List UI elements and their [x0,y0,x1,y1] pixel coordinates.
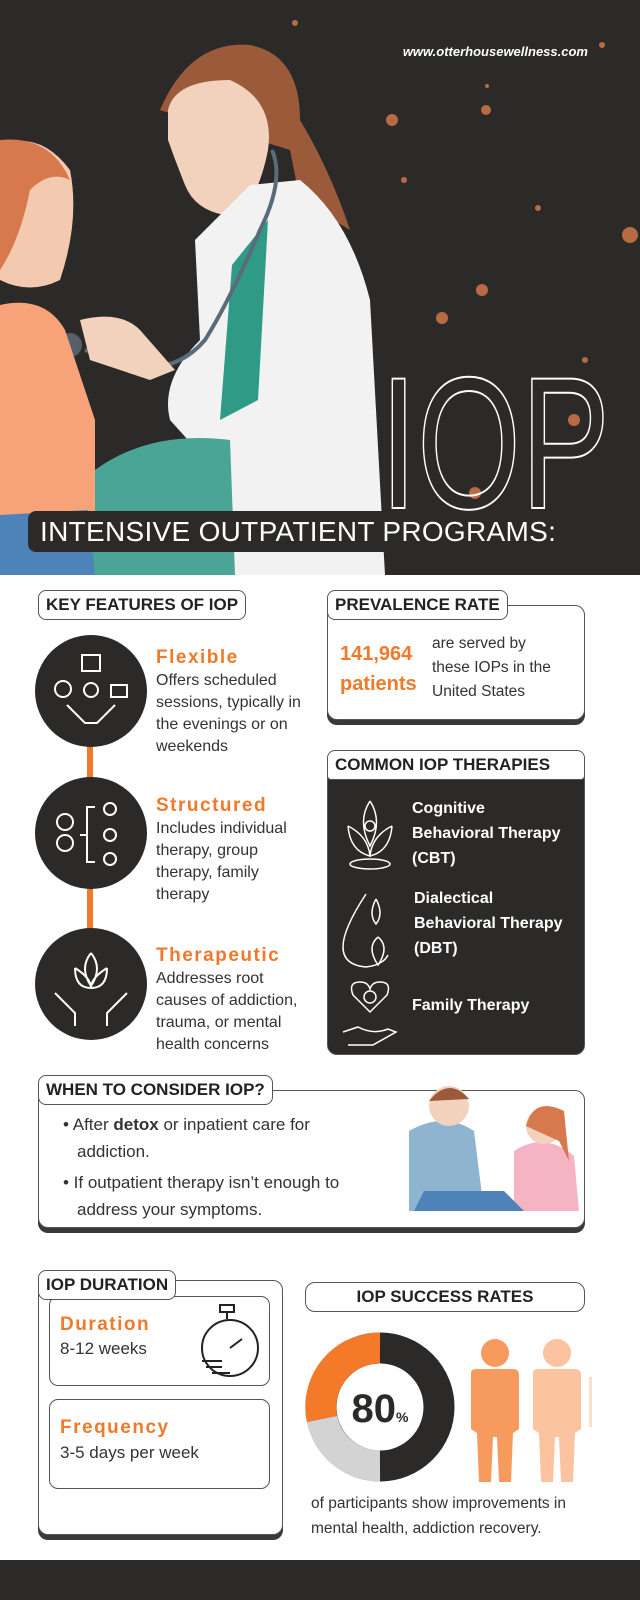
panel: prevalence rate [327,605,585,720]
text: structured: Includes individual therapy, group therapy, family therapy [156,820,287,903]
heading: prevalence [327,590,508,620]
stat: patients: patients [340,673,417,695]
heading: key features [38,590,246,620]
icon: structured [35,777,147,889]
text: flexible: Offers scheduled sessions, typically in the evenings or on weekends [156,672,301,755]
connector line [87,735,93,1015]
chart: donut 80%: 80% [352,1387,409,1431]
card: duration [49,1296,270,1386]
text: success caption: of participants show improvements in mental health, addiction recovery. [311,1495,566,1537]
illustration: doctor and child [0,20,638,575]
icon: people [471,1339,592,1482]
heading: success rates [305,1282,585,1312]
item: family therapy [342,981,530,1046]
chart: donut 80% [305,1332,454,1482]
item: CBT: Cognitive Behavioral Therapy (CBT) [412,800,560,867]
heading: therapies [327,750,585,780]
card: duration: Duration [60,1314,150,1335]
card: frequency: 3-5 days per week [60,1443,199,1462]
item: CBT [347,800,560,870]
text: structured: Structured [156,795,267,816]
text: therapeutic: Addresses root causes of addiction, trauma, or mental health concerns [156,970,297,1053]
heading: duration [38,1270,176,1300]
website url: www.otterhousewellness.com [403,44,588,59]
icon: flexible [35,635,147,747]
panel: key features [35,590,301,1053]
heading: when to consider [38,1075,273,1105]
illustration: doctor with girl [409,1086,579,1211]
subtitle banner: INTENSIVE OUTPATIENT PROGRAMS: [40,516,556,547]
list: consider: • If outpatient therapy isn’t enough to address your symptoms. [63,1173,339,1219]
card: duration: 8-12 weeks [60,1339,147,1358]
panel: IOP duration [38,1280,283,1535]
list: consider: • After detox or inpatient care for addiction. [63,1115,310,1161]
heading: prevalence: PREVALENCE RATE [335,595,500,614]
footer band [0,1560,640,1600]
heading: therapies: COMMON IOP THERAPIES [335,755,550,774]
item: DBT: Dialectical Behavioral Therapy (DBT) [414,890,562,957]
text: therapeutic: Therapeutic [156,945,280,966]
item: DBT [342,890,562,968]
heading: key features: KEY FEATURES OF IOP [46,595,238,614]
stat: patients: 141,964 [340,643,412,665]
card: frequency: Frequency [60,1417,170,1438]
heading: success rates: IOP SUCCESS RATES [357,1287,533,1306]
panel: therapies [327,750,585,1055]
heading: when to consider: WHEN TO CONSIDER IOP? [46,1080,265,1099]
heading: duration: IOP DURATION [46,1275,168,1294]
stat: patients [340,643,417,695]
icon: therapeutic [35,928,147,1040]
header: dark hero [0,0,640,575]
list: consider [63,1115,339,1219]
item: family therapy: Family Therapy [412,997,529,1014]
card: frequency [49,1399,270,1489]
subtitle banner [28,511,623,552]
panel: when to consider [38,1090,585,1228]
icon: stopwatch [201,1304,259,1377]
text: prevalence: are served by these IOPs in the United States [432,635,551,700]
text: flexible: Flexible [156,647,239,668]
